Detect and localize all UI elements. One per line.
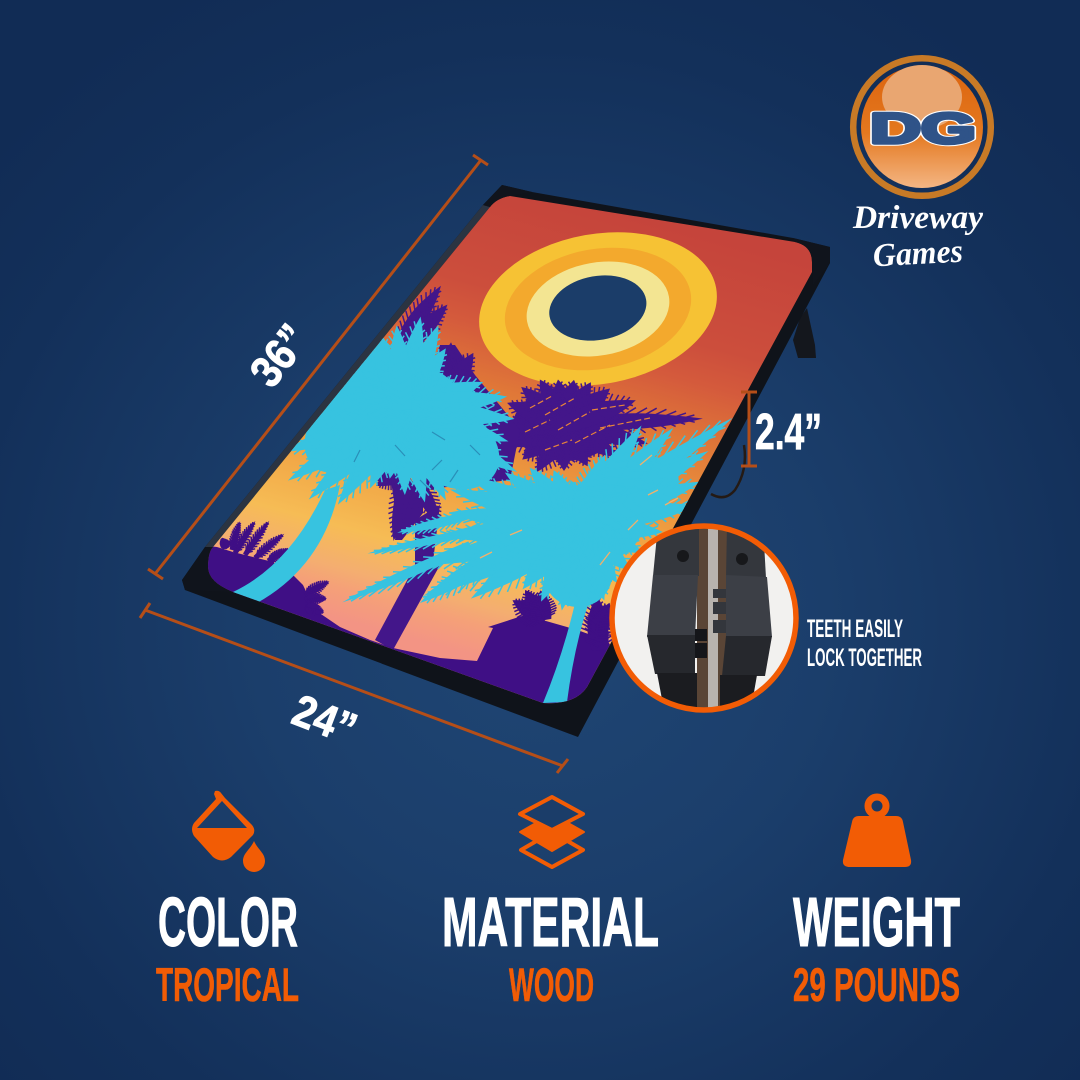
- left teeth: [695, 629, 707, 658]
- small bush by hill: [306, 580, 330, 596]
- board artwork: [208, 196, 812, 704]
- cyan palm right: [339, 404, 741, 703]
- dimension: 2.4 inch thickness: [741, 392, 822, 466]
- spec: material: [442, 883, 659, 1011]
- centre gap: [697, 528, 727, 708]
- spec: material: MATERIAL: [442, 883, 659, 961]
- logo: Driveway Games: Games: [872, 234, 964, 274]
- logo: Driveway Games: DG: [870, 105, 976, 153]
- logo: Driveway Games: [852, 58, 991, 274]
- icon: paint bucket: [192, 791, 265, 872]
- dimension: 36 inch length: 36”: [240, 314, 319, 396]
- spec: weight: WEIGHT: [793, 883, 960, 961]
- callout: teeth close-up circle: [612, 520, 796, 720]
- left bush fronds: [233, 521, 256, 554]
- long wispy fronds: [397, 512, 468, 535]
- right bracket: [726, 532, 766, 577]
- board frame: [182, 185, 830, 737]
- dimension: 36 inch length: [148, 155, 488, 579]
- purple ground and house silhouette: [208, 520, 612, 704]
- screws: [677, 550, 689, 562]
- logo: Driveway Games: Driveway: [852, 200, 983, 236]
- icon: weight: [843, 797, 911, 867]
- dimension: 2.4 inch thickness: 2.4”: [755, 403, 822, 460]
- dimension: 24 inch width: [140, 603, 568, 773]
- carry cord: [711, 445, 745, 497]
- cyan palm left: [233, 313, 527, 603]
- cornhole board: [180, 180, 840, 737]
- sun rings: [479, 232, 717, 386]
- left frame edge: [205, 205, 490, 547]
- spec: color: COLOR: [158, 883, 298, 961]
- bush behind house: [512, 598, 545, 620]
- orange ring: [612, 526, 796, 710]
- spec: color: TROPICAL: [156, 958, 299, 1011]
- board leg: [793, 308, 816, 358]
- callout text: [807, 615, 922, 672]
- callout text: LOCK TOGETHER: [807, 644, 922, 672]
- left bracket: [653, 525, 699, 576]
- right teeth: [713, 589, 726, 633]
- purple palm centre with trunk: [370, 277, 520, 650]
- spec: weight: [793, 883, 960, 1011]
- dimension: 24 inch width: 24”: [286, 684, 364, 755]
- spec: material: WOOD: [509, 958, 594, 1011]
- icon: material layers: [520, 797, 584, 867]
- spec: color: [156, 883, 299, 1011]
- callout text: TEETH EASILY: [807, 615, 903, 643]
- purple palm back right: [507, 380, 703, 472]
- spec: weight: 29 POUNDS: [793, 958, 960, 1011]
- board corner brackets: [182, 185, 830, 592]
- logo: Driveway Games: DG: [870, 105, 976, 153]
